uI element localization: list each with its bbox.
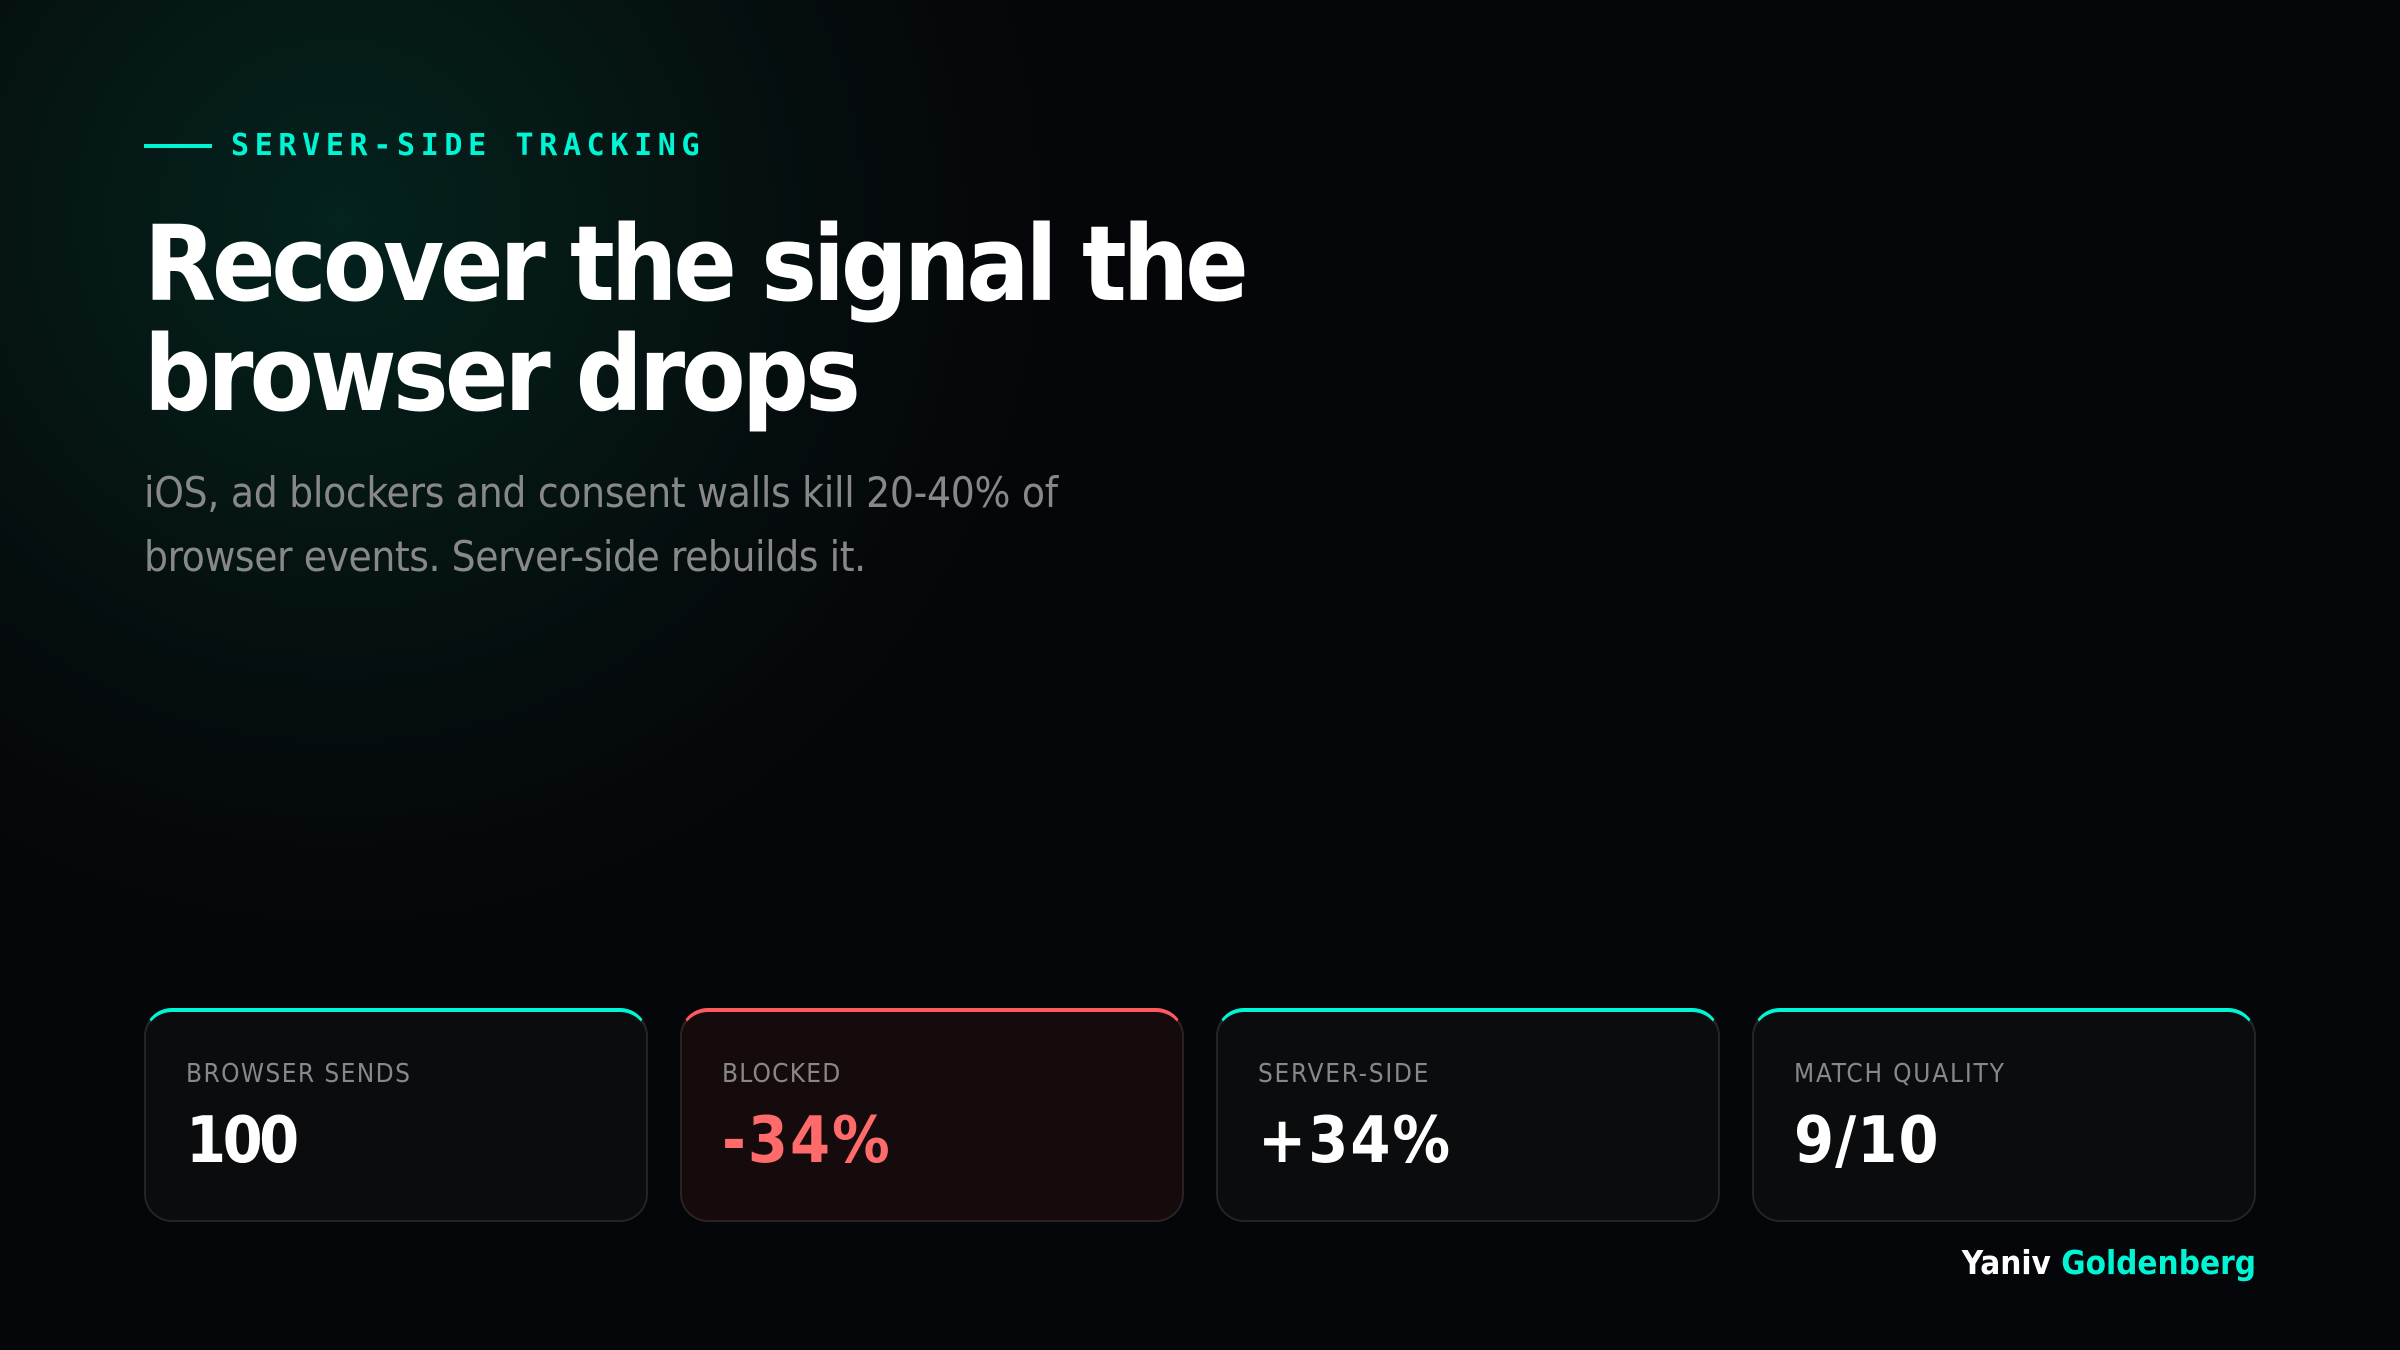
eyebrow line — [144, 144, 212, 148]
value: -34% — [722, 1104, 892, 1178]
value: 9/10 — [1794, 1104, 1940, 1178]
card: browser sends — [144, 1008, 648, 1222]
title: Recover the signal the — [144, 203, 1245, 325]
card: server-side — [1216, 1008, 1720, 1222]
eyebrow: SERVER-SIDE TRACKING — [231, 128, 705, 163]
subtitle: iOS, ad blockers and consent walls kill 20-40% of — [144, 468, 1058, 517]
label: MATCH QUALITY — [1794, 1059, 2006, 1089]
label: BROWSER SENDS — [186, 1059, 411, 1089]
title — [144, 203, 1245, 435]
title: browser drops — [144, 313, 857, 435]
subtitle — [144, 468, 1059, 581]
label: BLOCKED — [722, 1059, 841, 1089]
label: SERVER-SIDE — [1258, 1059, 1430, 1089]
card: match quality — [1752, 1008, 2256, 1222]
card: blocked — [680, 1008, 1184, 1222]
author credit: Yaniv Goldenberg — [1962, 1243, 2256, 1282]
subtitle: browser events. Server-side rebuilds it. — [144, 532, 866, 581]
value: +34% — [1258, 1104, 1452, 1178]
value: 100 — [186, 1104, 296, 1178]
